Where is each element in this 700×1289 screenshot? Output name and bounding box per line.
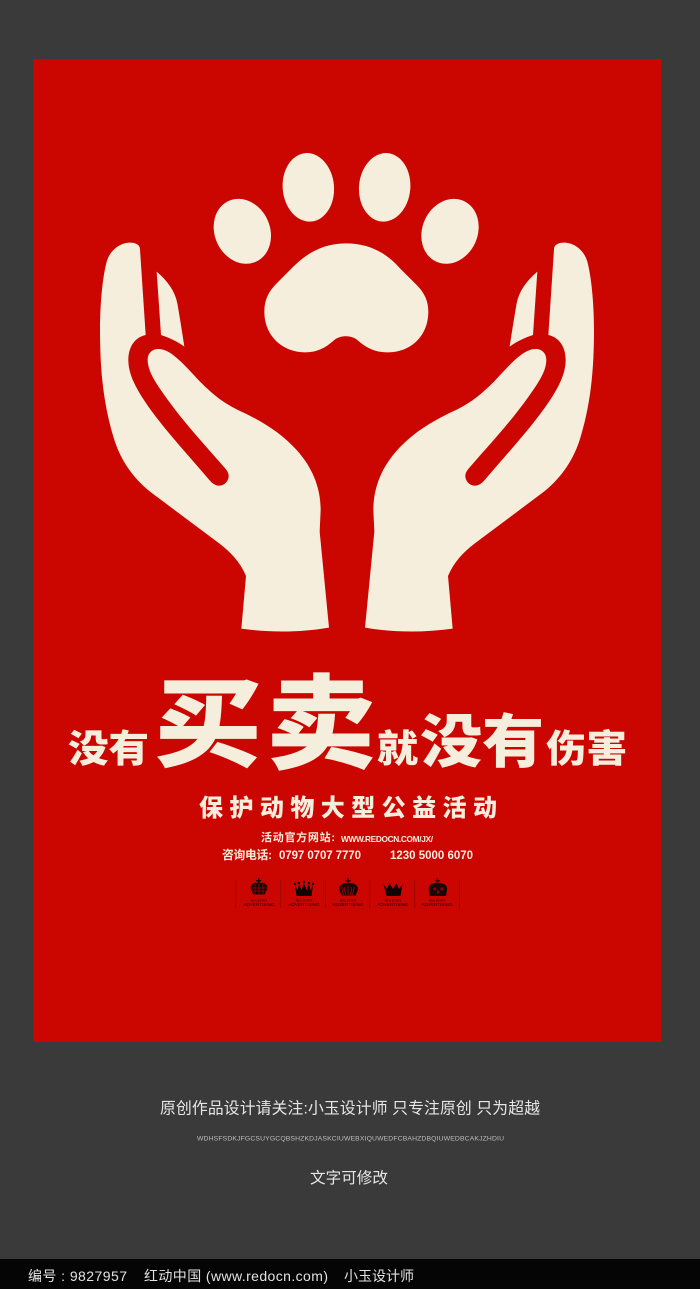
logo: crown 4: ADVERTISING [377,902,409,907]
website line: 活动官方网站: [261,830,335,844]
footer: designer note: 原创作品设计请关注:小玉设计师 只专注原创 只为超越 [160,1100,540,1118]
watermark text: 小玉设计师 [344,1268,414,1284]
watermark text: 编号 : 9827957 [28,1268,127,1284]
sponsor logos row [236,878,459,908]
icon: left hand [100,243,329,632]
logo: crown 3: REAL ESTATE [340,900,357,902]
footer: editable note: 文字可修改 [310,1169,388,1187]
watermark text: 红动中国 (www.redocn.com) [144,1268,328,1284]
logo: crown 4: REAL ESTATE [385,900,402,902]
logo: crown 1: ADVERTISING [243,902,275,907]
logo: crown 1 [243,878,275,907]
phone line: 1230 5000 6070 [390,850,473,862]
phone line [222,848,473,862]
icon: animal paw [204,151,489,352]
website line: WWW.REDOCN.COM/JX/ [341,834,434,844]
logo: crown 5: REAL ESTATE [429,900,446,902]
logo: crown 2 [288,881,320,907]
bottom bar [0,1259,700,1289]
phone line: 0797 0707 7770 [279,850,361,862]
title: slogan [68,641,627,790]
logo: crown 3: ADVERTISING [332,902,364,907]
title: slogan: 伤害 [546,718,627,773]
title: slogan: 卖 [266,641,376,790]
panel: red poster [33,59,661,1042]
title: slogan: 就 [377,718,418,773]
title: slogan: 买 [154,646,262,787]
website line [261,830,434,844]
subtitle: 保护动物大型公益活动 [199,788,497,823]
logo: crown 4 [377,883,409,907]
logo: crown 2: ADVERTISING [288,902,320,907]
phone line: 咨询电话: [222,848,272,862]
watermark text [28,1268,414,1284]
logo: crown 5 [421,878,453,907]
logo: crown 3 [332,878,364,907]
logo: crown 1: REAL ESTATE [251,900,268,902]
footer: small letters: WDHSFSDKJFGCSUYGCQBSHZKDJASKCIUWEBXIQUWEDFCBAHZDBQIUWEDBCAKJZHDIU [197,1136,504,1142]
logo: crown 2: REAL ESTATE [296,900,313,902]
title: slogan: 没有 [68,718,149,773]
title: slogan: 没有 [420,695,544,779]
icon: right hand [365,243,594,632]
logo: crown 5: ADVERTISING [421,902,453,907]
